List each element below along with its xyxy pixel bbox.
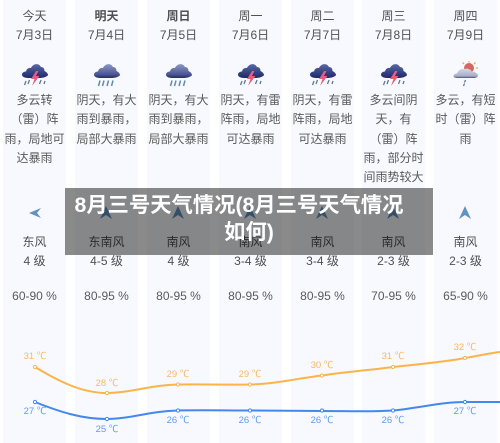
icon: wind arrow bbox=[100, 206, 112, 219]
wind info bbox=[234, 235, 267, 268]
high temperature line bbox=[33, 352, 500, 395]
icon: wind arrow bbox=[316, 206, 328, 219]
panel: day 4 forecast bbox=[219, 0, 282, 443]
weather description: （雷）阵 bbox=[369, 132, 418, 146]
date heading bbox=[88, 9, 125, 42]
low temperature labels: 26 ℃ bbox=[239, 415, 262, 426]
low temperature labels: 26 ℃ bbox=[311, 415, 334, 426]
date heading bbox=[232, 9, 269, 42]
weather description: 多云间阴 bbox=[369, 93, 418, 107]
date heading: 7月7日 bbox=[304, 28, 341, 42]
high temperature labels bbox=[24, 342, 477, 389]
high temperature labels: 31 ℃ bbox=[24, 351, 47, 362]
weather description: 可达暴雨 bbox=[298, 132, 346, 146]
humidity: 80-95 % bbox=[300, 289, 345, 303]
date heading: 7月3日 bbox=[16, 28, 53, 42]
humidity: 65-90 % bbox=[443, 289, 488, 303]
wind info: 南风 bbox=[310, 235, 334, 249]
wind info: 南风 bbox=[381, 235, 406, 249]
low temperature labels bbox=[24, 406, 477, 435]
low temperature labels: 27 ℃ bbox=[24, 406, 47, 417]
weather description bbox=[435, 93, 496, 146]
date heading: 7月6日 bbox=[232, 28, 269, 42]
weather description: 阵雨，局地 bbox=[292, 112, 352, 126]
title banner overlay: 8月三号天气情况(8月三号天气情况 bbox=[75, 193, 403, 217]
date heading: 7月8日 bbox=[375, 28, 412, 42]
wind info: 4 级 bbox=[167, 254, 190, 268]
high temperature labels: 28 ℃ bbox=[96, 378, 119, 389]
wind info bbox=[377, 235, 410, 268]
high temperature labels: 32 ℃ bbox=[454, 342, 477, 353]
icon: heavy rain bbox=[94, 64, 120, 86]
panel: day 3 forecast bbox=[147, 0, 210, 443]
icon: thunderstorm bbox=[22, 64, 48, 86]
icon: wind arrow bbox=[172, 206, 184, 219]
date heading: 周一 bbox=[238, 9, 262, 23]
high temperature labels: 29 ℃ bbox=[239, 369, 262, 380]
date heading bbox=[304, 9, 341, 42]
humidity: 80-95 % bbox=[84, 289, 129, 303]
weather description: 间雨势较大 bbox=[363, 170, 424, 184]
date heading: 周四 bbox=[453, 9, 478, 23]
weather description: 达暴雨 bbox=[16, 151, 52, 165]
wind info: 3-4 级 bbox=[306, 254, 339, 268]
wind info: 4 级 bbox=[23, 254, 46, 268]
icon: wind arrow bbox=[244, 206, 256, 219]
weather description: 局部大暴雨 bbox=[76, 132, 136, 146]
panel: day 6 forecast bbox=[362, 0, 425, 443]
weather description: 局部大暴雨 bbox=[148, 132, 208, 146]
wind info: 南风 bbox=[238, 235, 262, 249]
high temperature labels: 29 ℃ bbox=[167, 369, 190, 380]
humidity: 70-95 % bbox=[371, 289, 416, 303]
date heading: 明天 bbox=[94, 9, 118, 23]
date heading: 周三 bbox=[381, 9, 406, 23]
weather description bbox=[363, 93, 424, 184]
weather description bbox=[4, 93, 64, 165]
weather description: 阵雨，局地 bbox=[220, 112, 280, 126]
wind info: 4-5 级 bbox=[90, 254, 123, 268]
weather description: 阴天，有雷 bbox=[292, 93, 352, 107]
low temperature labels: 26 ℃ bbox=[382, 415, 405, 426]
title banner overlay bbox=[65, 188, 433, 255]
weather description: 阴天，有大 bbox=[148, 93, 208, 107]
panel: day 7 forecast bbox=[434, 0, 497, 443]
weather description: 雨到暴雨， bbox=[148, 112, 208, 126]
wind info bbox=[22, 235, 46, 268]
panel: day 1 forecast bbox=[3, 0, 66, 443]
icon: thunderstorm bbox=[381, 64, 407, 86]
icon: wind arrow bbox=[387, 208, 399, 219]
date heading bbox=[16, 9, 53, 42]
weather description bbox=[148, 93, 208, 146]
weather description: 雨到暴雨， bbox=[76, 112, 136, 126]
wind info: 南风 bbox=[453, 235, 478, 249]
date heading bbox=[160, 9, 197, 42]
wind info bbox=[449, 235, 482, 268]
wind info bbox=[88, 235, 124, 268]
wind info: 3-4 级 bbox=[234, 254, 267, 268]
wind info: 2-3 级 bbox=[377, 254, 410, 268]
panel: day 2 forecast bbox=[75, 0, 138, 443]
wind info: 东南风 bbox=[88, 235, 124, 249]
weather description: 雨 bbox=[459, 132, 472, 146]
humidity: 60-90 % bbox=[12, 289, 57, 303]
icon: heavy rain bbox=[166, 64, 192, 86]
icon: partly cloudy with shower bbox=[454, 61, 478, 86]
date heading: 周二 bbox=[310, 9, 334, 23]
weather description bbox=[76, 93, 136, 146]
weather description: 天，有 bbox=[375, 112, 412, 126]
wind info: 2-3 级 bbox=[449, 254, 482, 268]
wind info: 东风 bbox=[22, 235, 46, 249]
date heading bbox=[447, 9, 484, 42]
wind info bbox=[306, 235, 339, 268]
humidity: 80-95 % bbox=[228, 289, 273, 303]
weather description: 多云转 bbox=[16, 93, 52, 107]
icon: wind arrow bbox=[29, 208, 41, 218]
low temperature line bbox=[33, 400, 500, 421]
low temperature labels: 27 ℃ bbox=[454, 406, 477, 417]
weather description: （雷）阵 bbox=[10, 112, 58, 126]
weather description bbox=[220, 93, 280, 146]
weather description: 雨，局地可 bbox=[4, 132, 64, 146]
date heading: 7月9日 bbox=[447, 28, 484, 42]
weather description: 多云，有短 bbox=[435, 93, 496, 107]
low temperature labels: 26 ℃ bbox=[167, 415, 190, 426]
weather description: 阴天，有大 bbox=[76, 93, 136, 107]
icon: thunderstorm bbox=[310, 64, 336, 86]
weather description: 阴天，有雷 bbox=[220, 93, 280, 107]
panel: day 5 forecast bbox=[291, 0, 354, 443]
high temperature labels: 30 ℃ bbox=[311, 360, 334, 371]
date heading: 周日 bbox=[166, 9, 190, 23]
wind info bbox=[166, 235, 190, 268]
weather description bbox=[292, 93, 352, 146]
icon: wind arrow bbox=[459, 206, 471, 219]
high temperature labels: 31 ℃ bbox=[382, 351, 405, 362]
title banner overlay: 如何) bbox=[224, 220, 274, 244]
weather description: 时（雷）阵 bbox=[435, 112, 496, 126]
weather description: 可达暴雨 bbox=[226, 132, 274, 146]
wind info: 南风 bbox=[166, 235, 190, 249]
icon: thunderstorm bbox=[238, 64, 264, 86]
date heading: 7月4日 bbox=[88, 28, 125, 42]
date heading: 今天 bbox=[22, 9, 46, 23]
date heading: 7月5日 bbox=[160, 28, 197, 42]
humidity: 80-95 % bbox=[156, 289, 201, 303]
low temperature labels: 25 ℃ bbox=[96, 424, 119, 435]
weather description: 雨，部分时 bbox=[363, 151, 424, 165]
date heading bbox=[375, 9, 412, 42]
